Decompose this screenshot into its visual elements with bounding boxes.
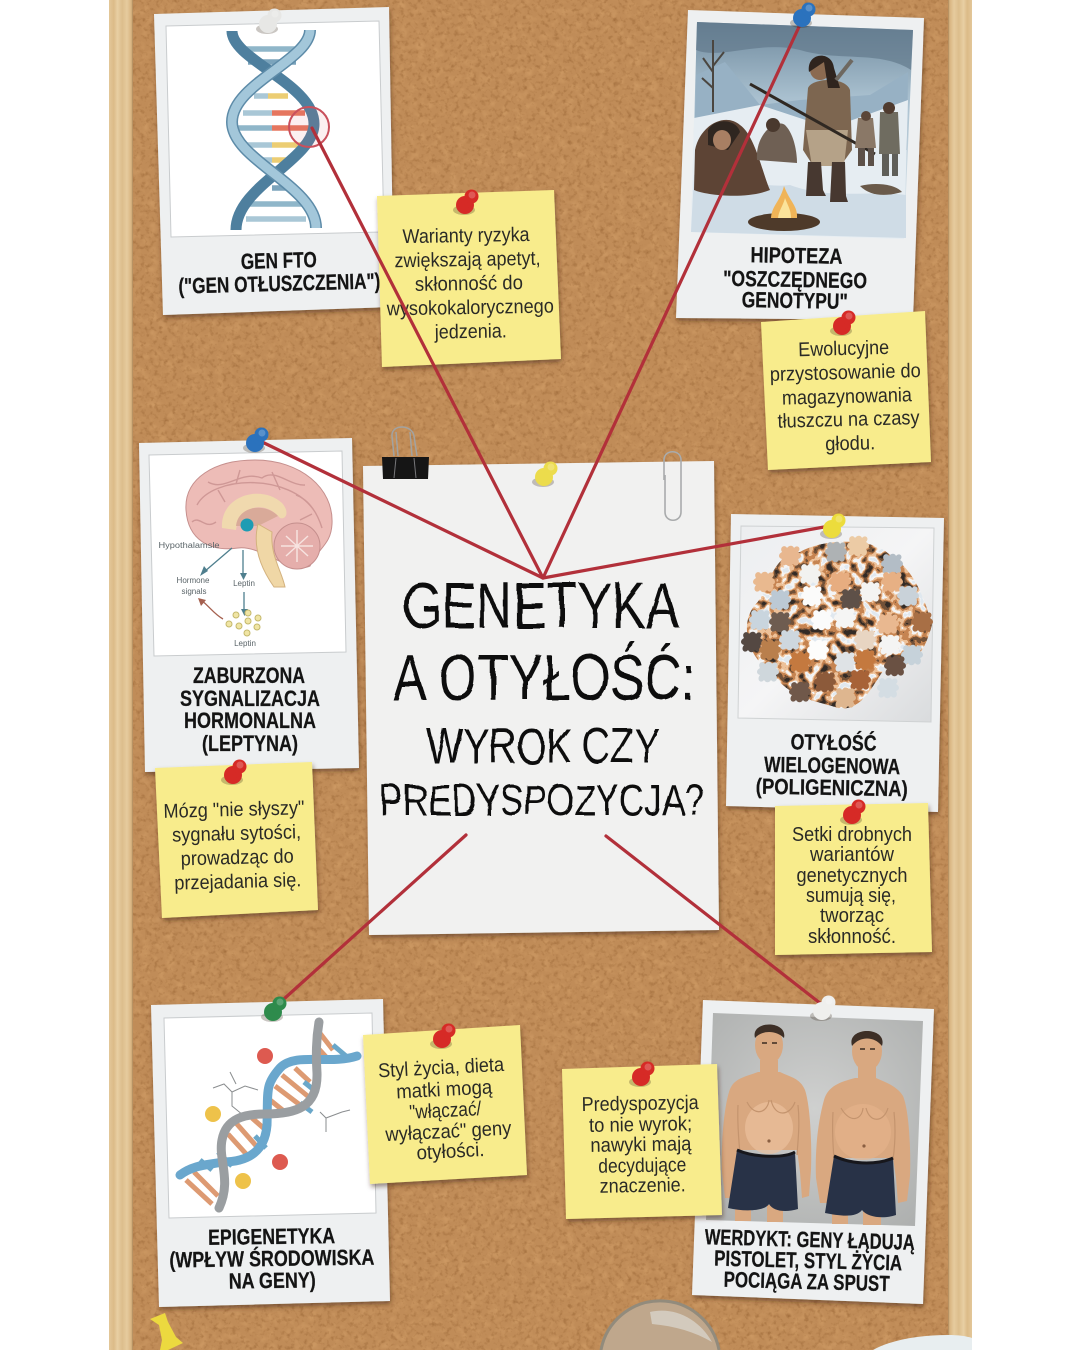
label: Hipoteza: "OSZCZĘDNEGO: [723, 266, 867, 293]
note: Styl życia: matki mogą: [396, 1076, 494, 1103]
pin: yellow centre: [532, 462, 558, 487]
note: Ewolucyjne przystosowanie: [761, 311, 931, 470]
label: Otyłość wielogenowa: OTYŁOŚĆ: [790, 729, 877, 756]
illustration: brain and leptin signalling: Hypothalamsle: [158, 541, 220, 550]
pin: red note 4: [840, 800, 866, 825]
photo card: Hipoteza oszczędnego genotypu: [676, 10, 924, 320]
note: Warianty ryzyka: jedzenia.: [434, 320, 507, 344]
illustration: epigenetic DNA helix: [180, 1022, 357, 1208]
icon: magnifying glass: [601, 1301, 719, 1350]
pin: blue: [790, 2, 816, 28]
note: Styl życia: otyłości.: [416, 1139, 485, 1164]
pin: green: [261, 996, 286, 1022]
illustration: brain and leptin signalling: Leptin: [234, 639, 256, 648]
note: Ewolucyjne przystosowanie: głodu.: [825, 432, 875, 456]
note: Styl życia: "włączać/: [409, 1098, 482, 1124]
note: Setki drobnych wariantów: wariantów: [809, 844, 895, 866]
label: Werdykt: WERDYKT: GENY ŁĄDUJĄ: [704, 1224, 915, 1255]
note: Setki drobnych wariantów: Setki drobnych: [792, 824, 912, 846]
photo card: Werdykt: [692, 1000, 934, 1304]
label: Werdykt: [703, 1224, 915, 1297]
pin: red note 2: [830, 310, 856, 336]
photo card: Zaburzona sygnalizacja hormonalna: [139, 438, 359, 772]
central paper with title: [363, 461, 719, 935]
label: Zaburzona sygnalizacja: (LEPTYNA): [202, 731, 298, 756]
label: Werdykt: PISTOLET, STYL ŻYCIA: [714, 1246, 903, 1275]
note: Ewolucyjne przystosowanie: magazynowania: [782, 384, 913, 410]
note: Styl życia: [363, 1025, 527, 1184]
note: Predyspozycja to nie wyrok: nawyki mają: [590, 1133, 692, 1157]
label: Epigenetyka: NA GENY): [229, 1267, 316, 1294]
wooden frame: [109, 0, 972, 1350]
label: Gen FTO: ("GEN OTŁUSZCZENIA"): [178, 268, 381, 299]
label: Werdykt: POCIĄGA ZA SPUST: [723, 1267, 890, 1296]
red strings connecting pins to the centre: [258, 14, 835, 1007]
label: Epigenetyka: [169, 1223, 375, 1294]
label: Gen FTO: GEN FTO: [240, 247, 317, 274]
note: Styl życia: wyłączać" geny: [384, 1118, 512, 1146]
photo card: Gen FTO: [154, 7, 394, 315]
icon: white plate: [873, 1335, 972, 1350]
note: Warianty ryzyka: zwiększają apetyt,: [394, 248, 541, 272]
label: Hipoteza: [723, 242, 868, 314]
note: Mózg nie słyszy: [155, 762, 318, 918]
label: Otyłość wielogenowa: [756, 729, 909, 801]
label: Epigenetyka: EPIGENETYKA: [208, 1223, 335, 1250]
illustration: ice age hunters in snow: [691, 22, 913, 239]
illustration: DNA helix with FTO highlighted: [232, 30, 329, 230]
pin: yellow puzzle: [820, 514, 846, 539]
icon: paper clip: [664, 452, 681, 520]
note: Ewolucyjne przystosowanie: przystosowanie do: [770, 360, 921, 386]
pin: red note 3: [221, 760, 246, 785]
note: Warianty ryzyka: skłonność do: [415, 272, 523, 296]
pin: red note 1: [453, 190, 478, 215]
note: Predyspozycja to nie wyrok: decydujące: [598, 1154, 686, 1178]
note: Predyspozycja to nie wyrok: to nie wyrok;: [589, 1113, 692, 1137]
note: Ewolucyjne przystosowanie: Ewolucyjne: [798, 337, 889, 361]
note: Setki drobnych wariantów: genetycznych: [796, 865, 908, 887]
pin: red note 5: [430, 1024, 456, 1049]
note: Setki drobnych wariantów: [775, 803, 932, 955]
title: PREDYSPOZYCJA?: [380, 776, 704, 825]
note: Predyspozycja to nie wyrok: [562, 1064, 722, 1219]
note: Mózg nie słyszy: prowadząc do: [180, 845, 294, 870]
label: Zaburzona sygnalizacja: SYGNALIZACJA: [180, 686, 320, 711]
illustration: brain and leptin signalling: [158, 460, 332, 648]
photo card: Epigenetyka: [151, 999, 390, 1307]
label: Hipoteza: HIPOTEZA: [750, 242, 843, 269]
label: Epigenetyka: (WPŁYW ŚRODOWISKA: [169, 1245, 375, 1272]
note: Mózg nie słyszy: sygnału sytości,: [172, 821, 301, 847]
label: Zaburzona sygnalizacja: HORMONALNA: [184, 708, 316, 733]
title: WYROK CZY: [426, 718, 660, 774]
icon: binder clip: [382, 427, 429, 479]
note: Styl życia: Styl życia, dieta: [378, 1054, 505, 1082]
illustration: brain and leptin signalling: Hormone: [177, 576, 210, 585]
note: Setki drobnych wariantów: sumują się,: [806, 885, 896, 907]
label: Gen FTO: [177, 245, 381, 299]
note: Mózg nie słyszy: przejadania się.: [174, 869, 302, 895]
label: Hipoteza: GENOTYPU": [742, 287, 848, 314]
note: Predyspozycja to nie wyrok: znaczenie.: [599, 1174, 686, 1198]
pin: red note 6: [629, 1062, 654, 1087]
note: Setki drobnych wariantów: tworząc: [820, 905, 884, 927]
cork board: [133, 0, 948, 1350]
pin: white verdict: [810, 996, 836, 1021]
icon: loose yellow push pin: [150, 1313, 183, 1350]
label: Zaburzona sygnalizacja: ZABURZONA: [193, 663, 305, 688]
title: GENETYKA: [402, 569, 680, 642]
note: Warianty ryzyka: [377, 190, 561, 367]
label: Zaburzona sygnalizacja: [180, 663, 320, 756]
title: A OTYŁOŚĆ:: [393, 641, 695, 714]
note: Setki drobnych wariantów: skłonność.: [808, 926, 896, 948]
note: Ewolucyjne przystosowanie: tłuszczu na czasy: [777, 407, 920, 433]
note: Warianty ryzyka: wysokokalorycznego: [386, 296, 554, 320]
note: Warianty ryzyka: Warianty ryzyka: [402, 224, 531, 248]
illustration: pile of puzzle pieces: [735, 535, 935, 715]
illustration: brain and leptin signalling: Leptin: [233, 579, 255, 588]
label: Otyłość wielogenowa: WIELOGENOWA: [764, 752, 900, 779]
label: Otyłość wielogenowa: (POLIGENICZNA): [756, 774, 908, 801]
illustration: two men comparison photo: [706, 1013, 923, 1226]
note: Predyspozycja to nie wyrok: Predyspozycja: [582, 1092, 700, 1116]
pin: white: [256, 8, 282, 34]
title: [380, 569, 704, 825]
pin: blue brain: [243, 428, 268, 453]
photo card: Otyłość wielogenowa: [726, 514, 944, 812]
illustration: brain and leptin signalling: signals: [182, 587, 206, 596]
note: Mózg nie słyszy: Mózg "nie słyszy": [163, 797, 305, 823]
